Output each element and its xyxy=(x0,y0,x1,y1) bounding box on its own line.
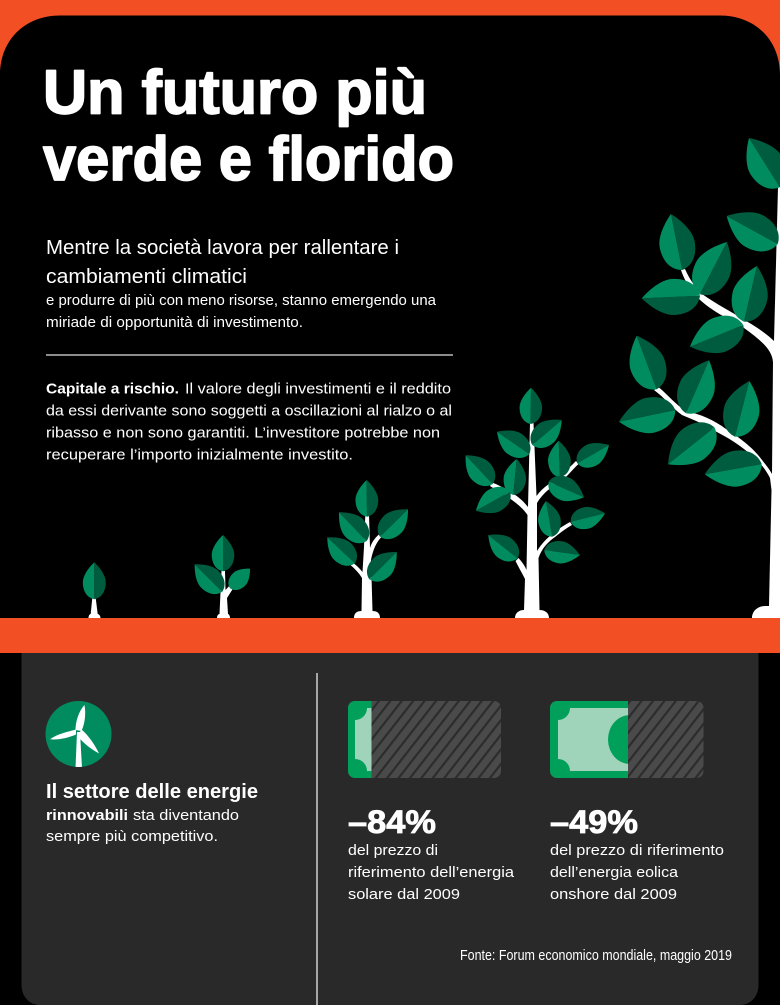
stat: wind xyxy=(550,804,724,903)
stat: solar: –84% xyxy=(348,804,436,840)
intro text xyxy=(46,237,437,331)
text: renewable sector: sempre più competitivo. xyxy=(46,828,218,845)
plant: branching tree xyxy=(457,388,615,618)
plant: sprout xyxy=(186,535,256,618)
stat: solar: riferimento dell’energia xyxy=(348,864,515,881)
risk disclaimer: da essi derivante sono soggetti a oscillazioni al rialzo o al xyxy=(46,402,452,420)
risk disclaimer: Il valore degli investimenti e il reddito xyxy=(185,380,451,398)
text: renewable sector: sta diventando xyxy=(133,807,239,824)
stat: wind: del prezzo di riferimento xyxy=(550,842,724,859)
stat: wind: onshore dal 2009 xyxy=(550,886,677,903)
stat: wind: –49% xyxy=(550,804,638,840)
icon: solar banknote bar xyxy=(348,701,501,778)
risk disclaimer: Capitale a rischio. xyxy=(46,380,179,398)
risk disclaimer: ribasso e non sono garantiti. L’investitore potrebbe non xyxy=(46,424,440,442)
intro text: miriade di opportunità di investimento. xyxy=(46,314,303,331)
intro text: Mentre la società lavora per rallentare i xyxy=(46,237,399,259)
plant: young tree xyxy=(319,480,416,618)
text: renewable sector xyxy=(46,781,258,845)
title xyxy=(43,58,454,194)
text: renewable sector: Il settore delle energie xyxy=(46,781,258,803)
source note: Fonte: Forum economico mondiale, maggio 2019 xyxy=(460,947,732,964)
ground band xyxy=(0,618,780,653)
vertical divider xyxy=(316,673,318,1005)
intro text: e produrre di più con meno risorse, stanno emergendo una xyxy=(46,292,437,309)
text: renewable sector: rinnovabili xyxy=(46,807,128,824)
risk disclaimer xyxy=(46,380,452,464)
title: verde e florido xyxy=(43,125,454,194)
plant: seedling xyxy=(83,562,106,618)
stat: solar: del prezzo di xyxy=(348,842,438,859)
icon: wind banknote bar xyxy=(550,701,704,778)
panel: renewable energy xyxy=(22,653,758,1005)
icon: wind turbine xyxy=(46,701,112,768)
plant: large tree xyxy=(615,128,780,618)
risk disclaimer: recuperare l’importo inizialmente investito. xyxy=(46,446,353,464)
title: Un futuro più xyxy=(43,58,427,128)
intro text: cambiamenti climatici xyxy=(46,266,247,288)
stat: solar xyxy=(348,804,515,903)
stat: solar: solare dal 2009 xyxy=(348,886,460,903)
stat: wind: dell’energia eolica xyxy=(550,864,679,881)
